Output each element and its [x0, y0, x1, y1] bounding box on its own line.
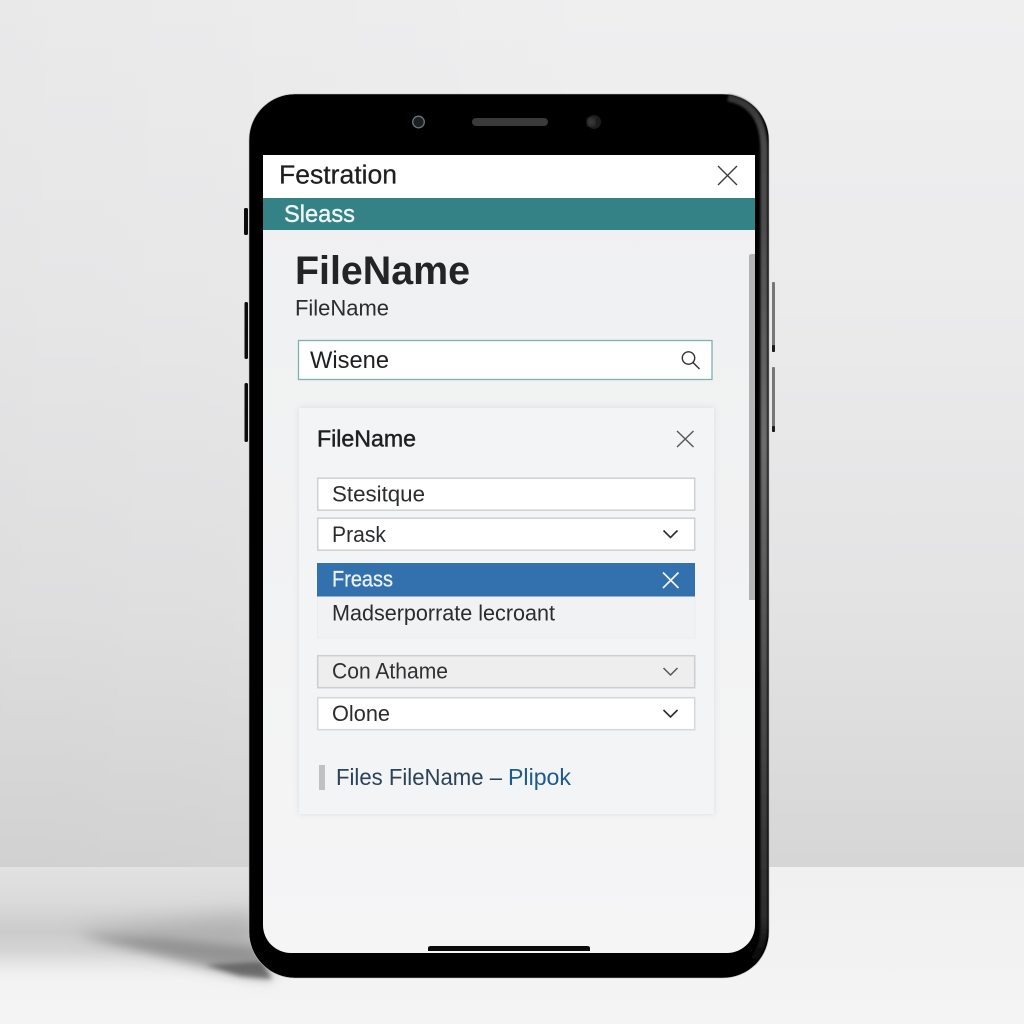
option panel [318, 596, 695, 638]
phone shadow on floor [0, 867, 290, 985]
title text: Festration [279, 162, 397, 190]
card close icon [677, 431, 694, 447]
form card [299, 408, 714, 814]
footer link: Plipok [508, 764, 571, 790]
selected row [317, 563, 695, 596]
right camera [587, 115, 601, 129]
text field: Stesitque [318, 478, 695, 510]
selected close icon [663, 572, 678, 588]
footer marker [319, 765, 325, 790]
screen [263, 155, 755, 953]
band label: Sleass [284, 201, 355, 228]
dropdown: Olone [318, 698, 695, 730]
phone device [244, 94, 775, 978]
close icon [718, 166, 737, 185]
dropdown: Con Athame [318, 656, 695, 688]
text field: Stesitque: Stesitque [332, 482, 425, 506]
card title: FileName [317, 426, 416, 452]
dropdown: Prask [318, 518, 695, 550]
search box [298, 340, 712, 380]
expanded dropdown [317, 563, 695, 638]
main heading: FileName [295, 249, 470, 293]
phone body [249, 94, 769, 978]
speaker grille [472, 118, 548, 126]
title bar [263, 155, 755, 198]
selected label: Freass [332, 567, 393, 592]
option label: Madserporrate lecroant [332, 601, 555, 626]
left camera [413, 116, 424, 128]
dropdown: Prask: Prask [332, 522, 387, 547]
scrollbar [749, 254, 755, 600]
footer link row [319, 764, 571, 790]
footer text: Files FileName – [336, 764, 502, 790]
teal band [263, 198, 755, 230]
dropdown: Con Athame: Con Athame [332, 658, 448, 684]
right side buttons [772, 282, 775, 432]
screen surface [263, 155, 755, 953]
floor surface [0, 867, 1024, 1024]
dropdown: Olone: Olone [332, 701, 390, 726]
left side buttons [244, 208, 248, 442]
right bezel highlight [728, 98, 764, 962]
search text: Wisene [310, 347, 389, 374]
search icon [682, 352, 700, 369]
home indicator [428, 946, 590, 951]
subheading: FileName [295, 296, 389, 320]
